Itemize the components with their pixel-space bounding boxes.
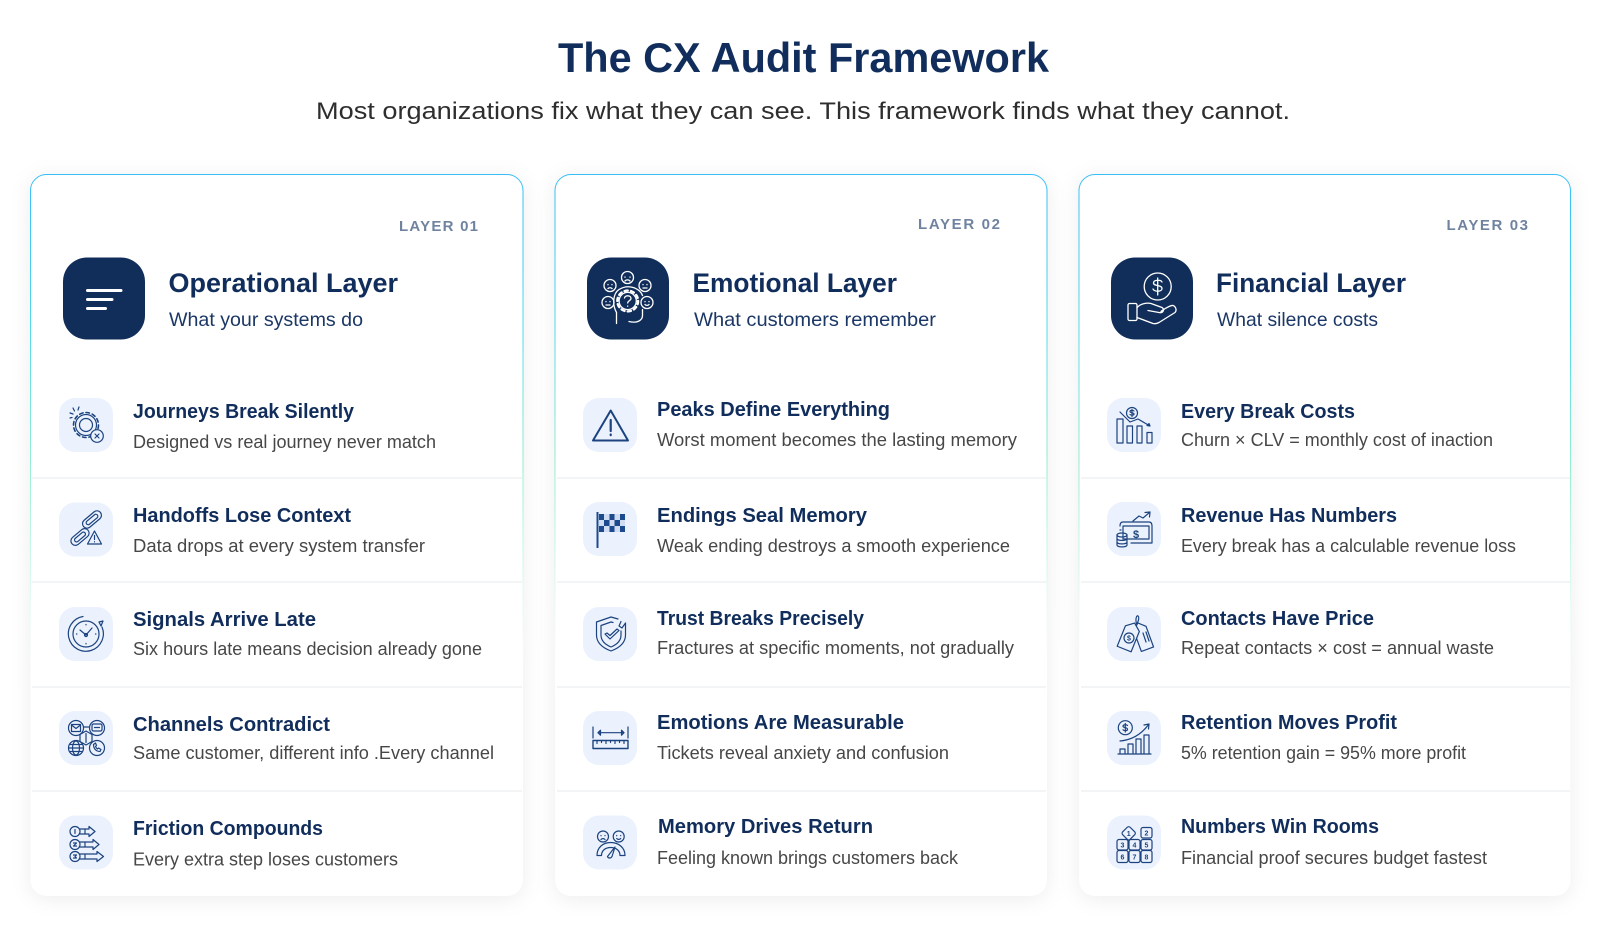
row: emotions are measurable — [583, 711, 949, 765]
layer label: LAYER 02 — [918, 216, 1000, 233]
row description: Tickets reveal anxiety and confusion — [657, 743, 949, 763]
row: handoffs lose context — [59, 502, 425, 556]
icon: money stack with arrow — [1107, 502, 1161, 556]
row: channels contradict — [59, 711, 494, 765]
layer label: LAYER 01 — [399, 218, 478, 235]
icon: rising bars with coin — [1107, 711, 1161, 765]
row title: Peaks Define Everything — [657, 398, 890, 421]
row description: Repeat contacts × cost = annual waste — [1181, 638, 1494, 658]
row description: Data drops at every system transfer — [133, 536, 425, 556]
icon: falling bars with coin — [1107, 398, 1161, 452]
row title: Numbers Win Rooms — [1181, 815, 1379, 838]
row: signals arrive late — [59, 607, 482, 661]
row description: Designed vs real journey never match — [133, 432, 436, 452]
row title: Friction Compounds — [133, 817, 323, 840]
row title: Memory Drives Return — [658, 815, 873, 838]
row: peaks define everything — [583, 398, 1017, 452]
row description: Every break has a calculable revenue loss — [1181, 536, 1516, 556]
row title: Channels Contradict — [133, 713, 330, 736]
row title: Emotions Are Measurable — [657, 711, 904, 734]
layer heading: Emotional Layer — [692, 268, 897, 298]
card background — [30, 174, 523, 896]
icon: money stack with arrow: $ — [1133, 529, 1139, 541]
icon: number blocks: 2 — [1145, 830, 1149, 838]
icon: ruler with span arrow — [583, 711, 637, 765]
row description: Worst moment becomes the lasting memory — [657, 430, 1017, 450]
row description: Six hours late means decision already gone — [133, 639, 482, 659]
icon: number blocks: 3 — [1121, 842, 1125, 850]
header icon: lines — [63, 258, 145, 340]
row title: Trust Breaks Precisely — [657, 607, 865, 630]
row description: 5% retention gain = 95% more profit — [1181, 743, 1466, 763]
panel: operational layer — [30, 174, 523, 896]
row description: Churn × CLV = monthly cost of inaction — [1181, 430, 1493, 450]
row title: Endings Seal Memory — [657, 504, 868, 527]
icon: warning triangle — [583, 398, 637, 452]
row title: Contacts Have Price — [1181, 607, 1374, 630]
icon: number blocks — [1107, 816, 1161, 870]
row: trust breaks precisely — [583, 607, 1014, 661]
icon: price tags — [1107, 607, 1161, 661]
row description: Feeling known brings customers back — [657, 848, 959, 868]
icon: broken gear — [59, 398, 113, 452]
icon: price tags: $ — [1127, 636, 1131, 642]
icon: checkered flag — [583, 502, 637, 556]
layer subheading: What customers remember — [694, 309, 937, 331]
row: retention moves profit — [1107, 711, 1466, 765]
row description: Weak ending destroys a smooth experience — [657, 536, 1010, 556]
row title: Journeys Break Silently — [133, 400, 355, 423]
icon: broken chain with warning — [59, 502, 113, 556]
row title: Retention Moves Profit — [1181, 711, 1397, 734]
row title: Handoffs Lose Context — [133, 504, 351, 527]
layer label: LAYER 03 — [1446, 217, 1528, 234]
layer subheading: What silence costs — [1217, 309, 1378, 331]
icon: channels — [59, 711, 113, 765]
row: endings seal memory — [583, 502, 1010, 556]
icon: cracked shield — [583, 607, 637, 661]
row: friction compounds — [59, 816, 398, 870]
row: numbers win rooms — [1107, 815, 1487, 870]
row: contacts have price — [1107, 607, 1494, 661]
row: memory drives return — [583, 815, 959, 870]
subtitle: Most organizations fix what they can see. This framework finds what they cannot. — [316, 98, 1290, 125]
panel: financial layer — [1079, 174, 1570, 896]
row: every break costs — [1107, 398, 1493, 452]
title: The CX Audit Framework — [558, 34, 1050, 81]
row description: Fractures at specific moments, not gradually — [657, 638, 1014, 658]
icon: number blocks: 1 — [1127, 831, 1131, 838]
row: journeys break silently — [59, 398, 436, 452]
row description: Same customer, different info .Every channel — [133, 743, 494, 763]
header icon: head with emotions — [587, 258, 669, 340]
card background — [1079, 174, 1570, 896]
row description: Every extra step loses customers — [133, 850, 398, 870]
icon: number blocks: 6 — [1121, 854, 1125, 862]
row description: Financial proof secures budget fastest — [1181, 848, 1487, 868]
layer heading: Operational Layer — [168, 268, 398, 298]
icon: number blocks: 7 — [1133, 854, 1137, 862]
icon: number blocks: 5 — [1145, 842, 1149, 850]
icon: number blocks: 4 — [1133, 842, 1137, 850]
row title: Revenue Has Numbers — [1181, 504, 1397, 527]
layer heading: Financial Layer — [1216, 268, 1406, 298]
icon: faces and gauge — [583, 816, 637, 870]
icon: clock — [59, 607, 113, 661]
row title: Signals Arrive Late — [133, 608, 316, 631]
icon: numbered arrows — [59, 816, 113, 870]
row: revenue has numbers — [1107, 502, 1516, 556]
card background — [555, 174, 1047, 896]
row title: Every Break Costs — [1181, 400, 1355, 423]
layer subheading: What your systems do — [169, 309, 363, 331]
panel: emotional layer — [555, 174, 1047, 896]
header icon: hand holding coin — [1111, 258, 1193, 340]
icon: number blocks: 8 — [1145, 854, 1149, 862]
